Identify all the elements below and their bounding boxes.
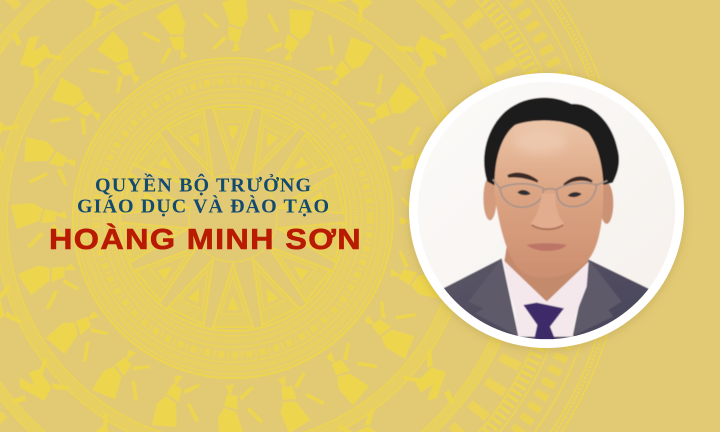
neck: [504, 247, 588, 302]
nose: [531, 193, 564, 230]
necktie: [523, 303, 564, 343]
forehead highlight: [513, 129, 567, 154]
mouth: [527, 243, 567, 251]
portrait shadow: [408, 74, 684, 350]
eyes: [517, 190, 582, 197]
suit jacket: [444, 258, 649, 339]
portrait frame: [409, 73, 684, 348]
glasses: [493, 179, 607, 207]
portrait photo: [413, 77, 680, 347]
nose shadow: [532, 225, 563, 229]
hair: [484, 98, 619, 187]
heading line 2: GIÁO DỤC VÀ ĐÀO TẠO: [77, 195, 329, 218]
left ear: [483, 176, 497, 220]
heading line 1: QUYỀN BỘ TRƯỞNG: [95, 172, 311, 196]
shirt collar: [503, 260, 589, 337]
title text block: [49, 172, 362, 256]
lapels: [468, 258, 622, 336]
photo background: [413, 77, 680, 343]
face: [494, 121, 603, 278]
eyebrows: [507, 173, 593, 186]
name: HOÀNG MINH SƠN: [49, 222, 362, 256]
right ear: [600, 183, 613, 224]
